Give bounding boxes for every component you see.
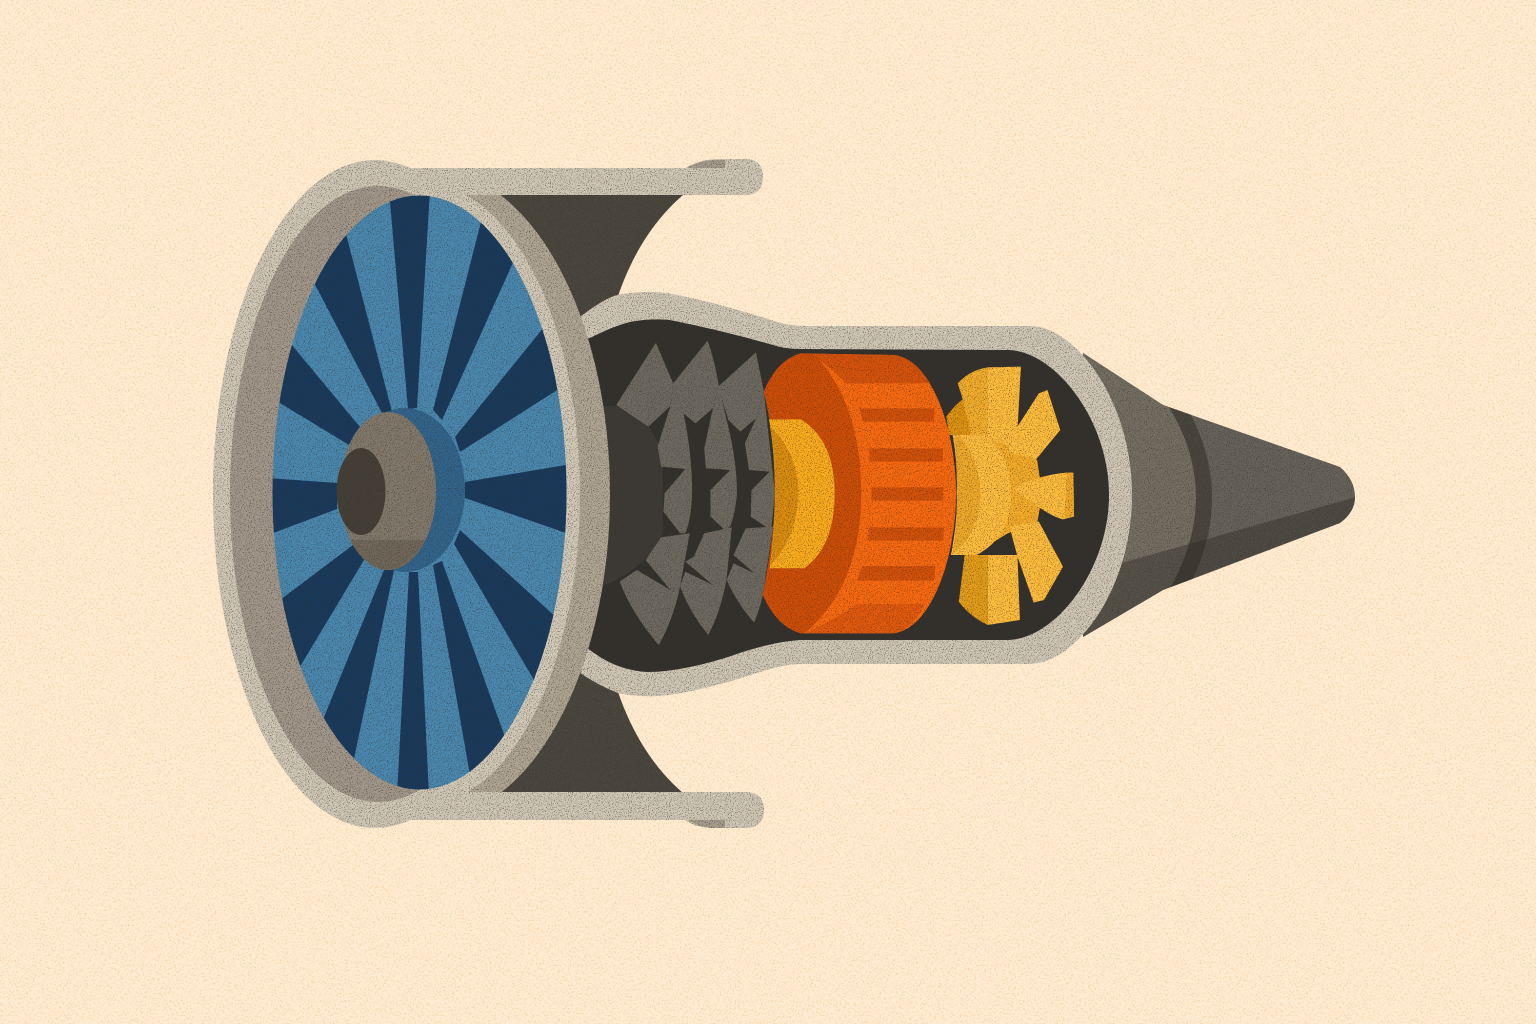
combustor top band [808, 354, 930, 383]
compressor section [601, 341, 775, 645]
turbine upper right blade [1008, 390, 1060, 459]
jet engine cutaway [213, 159, 1360, 828]
turbine lower right blade [1010, 522, 1063, 603]
spinner hole [336, 448, 386, 535]
nacelle inner tan wall [230, 186, 526, 802]
nacelle inner light ring [414, 195, 580, 792]
bottom cowl tip shade [688, 820, 725, 828]
turbine bottom blade [988, 555, 1020, 625]
upper pylon strut [470, 195, 683, 330]
spinner lower shade [350, 540, 426, 570]
combustor inner shadow [770, 426, 798, 565]
combustor bottom band [804, 604, 925, 633]
fan disc [272, 196, 566, 790]
turbine bottom blade shaded side [959, 555, 988, 625]
core interior [570, 319, 1109, 672]
turbine top blade [987, 367, 1021, 450]
turbine front hub [951, 435, 1011, 555]
turbine front hub shadow [953, 437, 980, 553]
compressor blades row 2 [673, 341, 737, 635]
fan [268, 190, 572, 795]
top cowl tip shade [687, 160, 725, 168]
fan dark wedges [268, 190, 572, 795]
turbine right blade [1013, 473, 1074, 519]
compressor blades row 1 [616, 343, 692, 645]
turbine rear hub [946, 399, 973, 435]
top nacelle cowl bar [392, 159, 763, 195]
combustor [763, 353, 956, 633]
compressor blades row 3 [718, 352, 775, 623]
combustor body [763, 353, 956, 633]
exhaust nozzle [1083, 353, 1355, 637]
fan spinner base [345, 408, 465, 572]
turbine top blade shaded side [958, 367, 988, 441]
combustor slots [857, 408, 944, 581]
outer nacelle rim [213, 160, 537, 828]
bottom nacelle cowl bar [392, 792, 764, 828]
combustor inner opening [769, 419, 835, 568]
turbine right blade tip [1065, 473, 1074, 519]
combustor front face [763, 353, 861, 633]
compressor hub [601, 406, 663, 587]
core casing [570, 292, 1132, 696]
turbine centre disc [970, 433, 1042, 557]
fan spinner [340, 412, 436, 570]
nacelle rear band [466, 195, 610, 792]
lower pylon strut [470, 660, 683, 793]
turbine [946, 367, 1074, 625]
